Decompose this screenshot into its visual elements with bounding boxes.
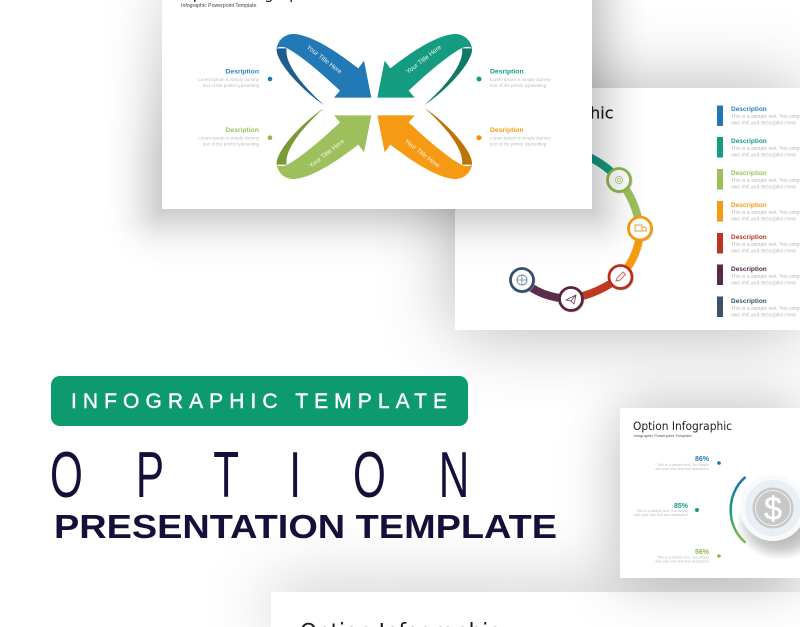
legend item: navy: own text and description here. [731,312,798,318]
step: gear icon [608,168,632,194]
description: green: Lorem Ipsum is simply dummy [198,136,260,140]
stat: 56% [655,549,721,564]
legend item: teal [717,137,800,158]
legend item: teal: Description [731,138,767,145]
legend item: red: Description [731,234,767,241]
panel: coin option slide [620,408,800,578]
legend item: blue: own text and description here. [731,120,798,126]
legend item: plum: Description [731,266,767,273]
headline: presentation template: PRESENTATION TEMPLATE [54,508,557,545]
step: paper plane icon [560,288,584,312]
slide subtitle: Infographic Powerpoint Template [181,3,257,9]
arrow label: orange: Your Title Here [403,138,441,170]
coin icon [736,475,800,560]
legend item: teal: own text and description here. [731,152,798,158]
stat: 86% [655,456,721,471]
legend item: red [717,233,800,254]
description: green: Desription [225,127,259,134]
description: orange: Desription [490,127,524,134]
stat: 56%: This is a sample text. You simply [657,556,709,560]
stat: 85%: add your own text and description [634,513,688,517]
title: Option Infographic [633,419,732,433]
step: globe icon [510,268,536,294]
description: green: text of the printin typesetting [203,142,259,146]
curved steps chart [522,155,640,299]
stat: 86%: 86% [695,456,710,463]
description: blue [198,68,272,88]
legend item: orange: Description [731,202,767,209]
legend item: blue [717,106,800,126]
stat: 85%: This is a sample text. You simply [636,509,688,513]
headline: OPTION: OPTION [50,438,469,511]
stat: 86%: This is a sample text. You simply [657,463,709,467]
panel: bottom slide [271,592,800,627]
stat: 86%: add your own text and description [655,467,709,471]
panel: circular steps slide [455,88,800,330]
description: teal: text of the printin typesetting [490,83,547,88]
legend item: green: own text and description here. [731,184,798,190]
arrow: green [277,108,371,179]
badge: infographic template [51,376,468,426]
panel: four arrows slide [162,0,592,209]
description: orange: text of the printin typesetting [490,142,547,146]
description: teal: Lorem Ipsum is simply dummy [490,77,552,82]
arrow: blue [277,34,371,105]
arrow: orange [377,108,472,179]
legend item: green [717,169,800,190]
legend item: orange: own text and description here. [731,216,798,222]
description: blue: Desription [225,68,259,76]
legend item: plum: own text and description here. [731,280,798,286]
stat: 85% [634,503,699,517]
subtitle: Infographic Powerpoint Template [634,433,692,438]
description: orange: Lorem Ipsum is simply dummy [490,136,552,140]
legend item: plum [717,264,800,286]
step: truck icon [628,217,654,242]
coin icon: $ [764,490,782,526]
slide title: Option Infographic [465,104,614,122]
legend item: navy: Description [731,298,767,305]
legend item: red: own text and description here. [731,248,798,254]
legend item: blue: Description [731,106,767,113]
step: pencil icon [609,266,634,290]
legend item: navy [717,296,800,318]
stat: 56%: 56% [695,549,710,556]
stat: 85%: 85% [674,503,689,510]
description: blue: Lorem Ipsum is simply dummy [198,77,260,82]
arrow label: teal: Your Title Here [405,44,443,76]
description: orange [476,127,552,146]
description: green [198,127,272,146]
description: blue: text of the printin typesetting [203,83,259,88]
description: teal [476,68,552,88]
description: teal: Desription [490,68,524,76]
badge: infographic template: INFOGRAPHIC TEMPLATE [71,390,447,413]
stat: 56%: add your own text and description [655,560,709,564]
arrow label: blue: Your Title Here [305,44,343,76]
gradient arc [731,478,745,542]
legend item: green: Description [731,170,767,177]
arrow: teal [377,34,472,105]
legend item: orange [717,201,800,222]
arrow label: green: Your Title Here [308,138,346,170]
